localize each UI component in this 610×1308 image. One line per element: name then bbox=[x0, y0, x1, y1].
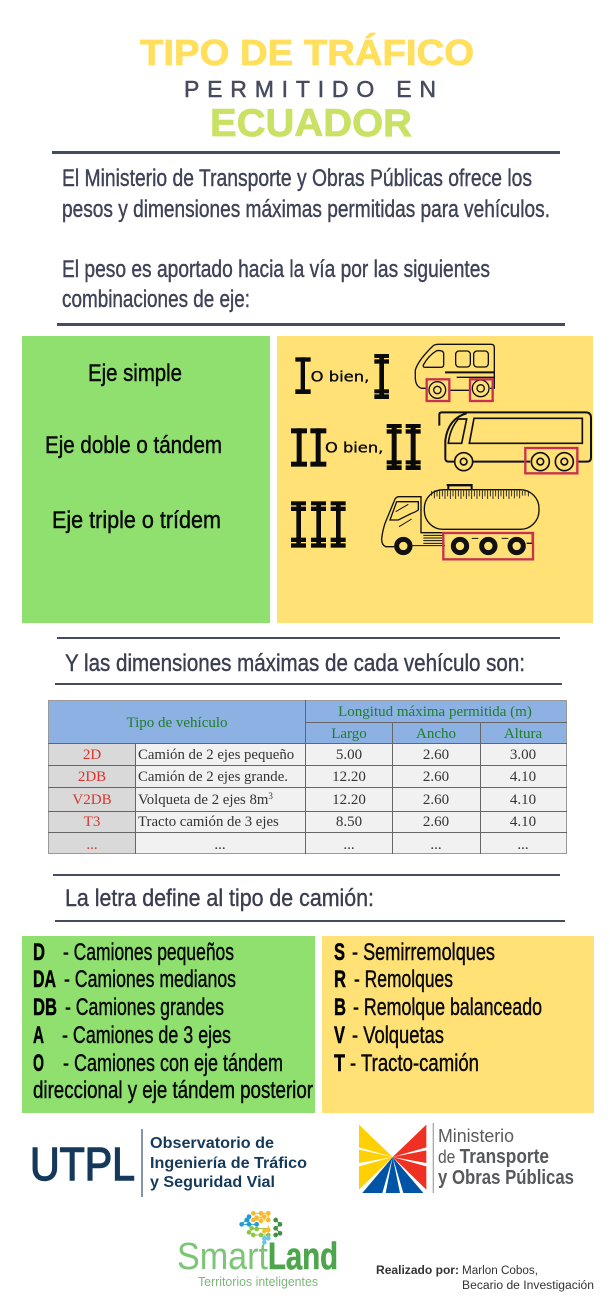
title: ECUADOR bbox=[210, 102, 412, 145]
panel: letter definitions yellow: T bbox=[334, 1050, 345, 1077]
table: vehicle dimensions: 4.10 bbox=[510, 814, 536, 830]
logo: SmartLand: Smart bbox=[177, 1236, 268, 1278]
panel: letter definitions green: - Camiones con eje tándem bbox=[63, 1050, 283, 1077]
heading: truck letters: La letra define al tipo de camión: bbox=[65, 885, 374, 912]
icon: brain dots bbox=[239, 1211, 282, 1245]
logo: SmartLand bbox=[177, 1211, 338, 1289]
panel: letter definitions green: DA bbox=[33, 966, 56, 993]
logo: UTPL bbox=[30, 1129, 307, 1197]
logo: UTPL: y Seguridad Vial bbox=[150, 1174, 275, 1191]
icon: tandem axles: O bien, bbox=[325, 441, 383, 457]
table: vehicle dimensions: Tipo de vehículo bbox=[126, 715, 228, 731]
table: vehicle dimensions: ... bbox=[430, 837, 442, 853]
icon: triple axles bbox=[291, 501, 346, 548]
panel: letter definitions yellow bbox=[322, 936, 594, 1113]
table: vehicle dimensions: 3.00 bbox=[510, 747, 536, 763]
panel: letter definitions green: O bbox=[33, 1050, 44, 1077]
panel: letter definitions green: DB bbox=[33, 994, 57, 1021]
table: vehicle dimensions: 3 bbox=[268, 791, 273, 801]
panel: letter definitions yellow: R bbox=[334, 966, 346, 993]
table: vehicle dimensions bbox=[48, 700, 567, 854]
panel: axle names bbox=[22, 336, 270, 623]
panel: letter definitions yellow: - Remolques bbox=[354, 966, 453, 993]
panel: letter definitions green: - Camiones grandes bbox=[65, 994, 224, 1021]
icon: tandem axles bbox=[291, 424, 421, 470]
panel: letter definitions green: D bbox=[33, 939, 45, 966]
panel: letter definitions yellow: S bbox=[334, 939, 345, 966]
table: vehicle dimensions: Longitud máxima permitida (m) bbox=[338, 704, 532, 720]
table: vehicle dimensions: 12.20 bbox=[332, 769, 366, 785]
table: vehicle dimensions: Largo bbox=[331, 726, 367, 742]
panel: letter definitions yellow: - Semirremolques bbox=[352, 939, 495, 966]
credit: Becario de Investigación bbox=[462, 1280, 594, 1292]
table: vehicle dimensions: 4.10 bbox=[510, 792, 536, 808]
logo: Ministerio de Transporte y Obras Públicas bbox=[359, 1123, 574, 1193]
panel: letter definitions green: - Camiones de 3 ejes bbox=[62, 1022, 231, 1049]
credit: Marlon Cobos, bbox=[462, 1265, 538, 1277]
intro text: combinaciones de eje: bbox=[62, 286, 250, 313]
table: vehicle dimensions: 2.60 bbox=[423, 769, 449, 785]
title: PERMITIDO EN bbox=[184, 76, 436, 102]
icon: tanker truck bbox=[382, 485, 539, 559]
panel: letter definitions green: - Camiones pequeños bbox=[63, 939, 234, 966]
panel: letter definitions green: direccional y eje tándem posterior bbox=[33, 1077, 313, 1104]
icon: bus bbox=[439, 412, 591, 473]
table: vehicle dimensions: 2DB bbox=[78, 769, 106, 785]
panel: letter definitions yellow: - Volquetas bbox=[352, 1022, 444, 1049]
table: vehicle dimensions: Tracto camión de 3 ejes bbox=[138, 814, 279, 830]
panel: letter definitions green: A bbox=[33, 1022, 44, 1049]
title: TIPO DE TRÁFICO bbox=[140, 32, 474, 73]
table: vehicle dimensions: ... bbox=[343, 837, 355, 853]
table: vehicle dimensions: 5.00 bbox=[336, 747, 362, 763]
intro text bbox=[62, 165, 550, 313]
icon: van bbox=[415, 344, 494, 401]
panel: axle diagrams and vehicles bbox=[277, 336, 593, 623]
credit bbox=[376, 1265, 594, 1292]
heading: dimensions: Y las dimensiones máximas de cada vehículo son: bbox=[65, 650, 525, 677]
table: vehicle dimensions: 2.60 bbox=[423, 792, 449, 808]
panel: axle names: Eje triple o trídem bbox=[52, 507, 221, 534]
icon: simple axles bbox=[295, 354, 389, 399]
table: vehicle dimensions: T3 bbox=[84, 814, 100, 830]
panel: letter definitions yellow: B bbox=[334, 994, 346, 1021]
panel: axle names: Eje doble o tándem bbox=[45, 432, 222, 459]
table: vehicle dimensions: Altura bbox=[504, 726, 542, 742]
table: vehicle dimensions: Ancho bbox=[416, 726, 456, 742]
logo: Ministerio de Transporte y Obras Públicas: Ministerio bbox=[438, 1126, 514, 1146]
logo: UTPL: UTPL bbox=[30, 1138, 135, 1190]
table: vehicle dimensions: 8.50 bbox=[336, 814, 362, 830]
logo: Ministerio de Transporte y Obras Públicas: y Obras Públicas bbox=[438, 1167, 574, 1189]
logo: UTPL: Observatorio de bbox=[150, 1135, 274, 1152]
logo: UTPL: Ingeniería de Tráfico bbox=[150, 1155, 307, 1172]
table: vehicle dimensions: 4.10 bbox=[510, 769, 536, 785]
panel: axle names: Eje simple bbox=[88, 360, 182, 387]
panel: letter definitions yellow: - Remolque balanceado bbox=[353, 994, 542, 1021]
table: vehicle dimensions: Camión de 2 ejes pequeño bbox=[138, 747, 294, 763]
table: vehicle dimensions: V2DB bbox=[72, 792, 112, 808]
logo: Ministerio de Transporte y Obras Públicas: de Transporte bbox=[438, 1146, 549, 1168]
panel: letter definitions yellow: V bbox=[334, 1022, 345, 1049]
table: vehicle dimensions: Camión de 2 ejes grande. bbox=[138, 769, 288, 785]
panel: letter definitions green: - Camiones medianos bbox=[64, 966, 236, 993]
table: vehicle dimensions: 2D bbox=[83, 747, 101, 763]
table: vehicle dimensions: ... bbox=[517, 837, 529, 853]
title bbox=[140, 32, 474, 145]
table: vehicle dimensions: ... bbox=[214, 837, 226, 853]
intro text: El peso es aportado hacia la vía por las siguientes bbox=[62, 256, 490, 283]
icon: simple axles: O bien, bbox=[311, 370, 369, 386]
table: vehicle dimensions: 2.60 bbox=[423, 747, 449, 763]
panel: letter definitions yellow: - Tracto-camión bbox=[350, 1050, 479, 1077]
logo: SmartLand: Territorios inteligentes bbox=[198, 1274, 318, 1289]
credit: Realizado por: bbox=[376, 1265, 459, 1277]
panel: letter definitions green bbox=[22, 936, 315, 1113]
table: vehicle dimensions: 12.20 bbox=[332, 792, 366, 808]
table: vehicle dimensions: ... bbox=[86, 837, 98, 853]
table: vehicle dimensions: Volqueta de 2 ejes 8m bbox=[138, 792, 268, 808]
table: vehicle dimensions: 2.60 bbox=[423, 814, 449, 830]
logo: SmartLand: Land bbox=[268, 1236, 338, 1278]
